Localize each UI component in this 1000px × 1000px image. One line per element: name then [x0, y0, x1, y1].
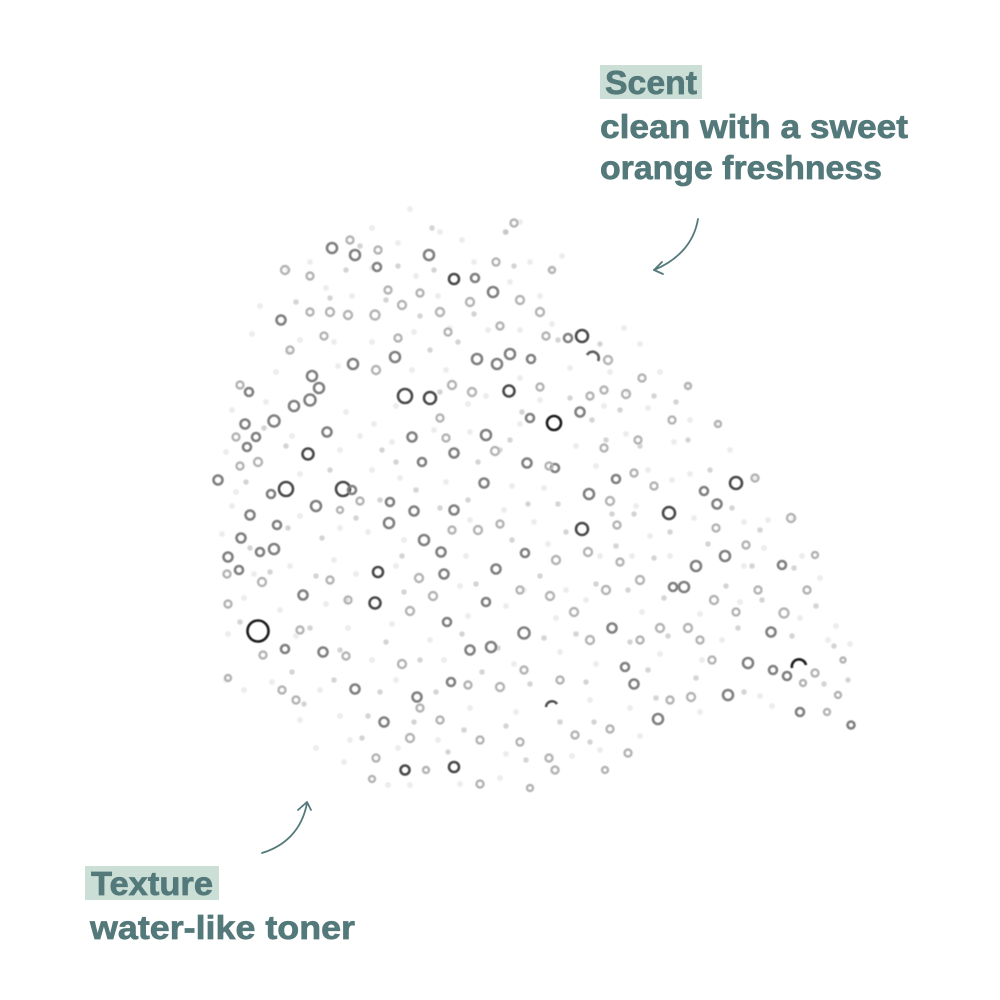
arrow: texture — [262, 802, 311, 853]
callout: texture — [85, 865, 355, 946]
text: scent description — [600, 108, 908, 186]
droplet texture swatch — [214, 209, 854, 791]
callout: scent — [600, 64, 908, 186]
highlighted heading: Texture: Texture — [91, 865, 213, 902]
highlighted heading: Scent: Scent — [605, 64, 697, 101]
text: scent description: clean with a sweet — [600, 108, 908, 145]
text: texture description: water-like toner — [89, 909, 355, 946]
text: scent description: orange freshness — [600, 149, 882, 186]
arrow: scent — [654, 219, 698, 274]
